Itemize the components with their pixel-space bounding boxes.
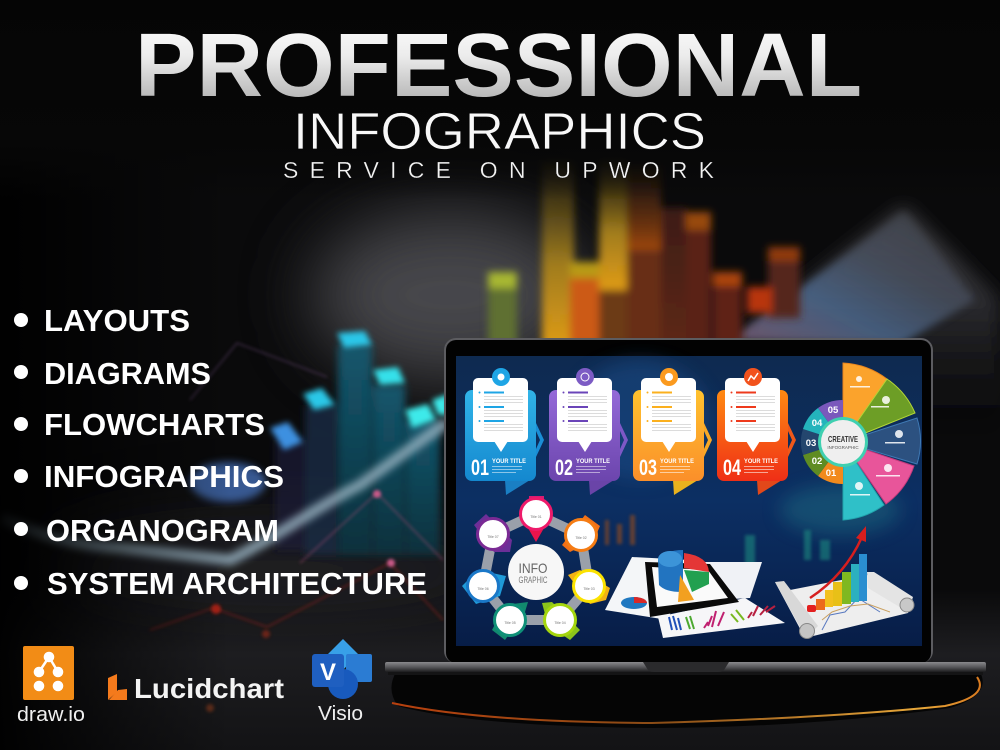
card 02: YOUR TITLE (576, 459, 610, 465)
subtitle: INFOGRAPHICS: INFOGRAPHICS (293, 103, 706, 161)
card 01 (465, 368, 544, 495)
hexagon infographic: Title 05 (504, 621, 516, 625)
logo: Lucidchart: Lucidchart (134, 673, 284, 704)
card 03: YOUR TITLE (660, 459, 694, 465)
icon: draw.io: draw.io (17, 704, 85, 726)
service list: ORGANOGRAM (46, 513, 279, 548)
hexagon infographic (462, 496, 610, 640)
pie chart (658, 550, 709, 602)
wheel: small ring: 01 (826, 468, 837, 479)
wheel: small ring (801, 400, 843, 484)
background: warm bars (488, 160, 800, 350)
service list: FLOWCHARTS (44, 407, 265, 442)
creative infographic wheel (801, 363, 920, 520)
icon: draw.io (17, 646, 85, 726)
card 04: YOUR TITLE (744, 459, 778, 465)
wheel: centre badge: INFOGRAPHIC (827, 445, 859, 450)
subtitle: service on upwork: SERVICE ON UPWORK (283, 157, 715, 183)
laptop lid (444, 338, 933, 663)
red arrow (810, 526, 866, 598)
wheel: small ring: 03 (806, 438, 816, 449)
laptop screen (456, 356, 922, 646)
tablet with pie chart and papers (605, 550, 785, 638)
mini pie (621, 597, 647, 609)
hexagon infographic: Title 01 (530, 515, 542, 519)
hexagon infographic: Title 02 (575, 536, 587, 540)
hexagon infographic: Title 06 (477, 587, 489, 591)
centre circle: INFO (518, 560, 548, 576)
service list: LAYOUTS (44, 303, 190, 338)
icon: Visio (312, 639, 372, 725)
background: paper wedge (720, 207, 1000, 440)
hexagon infographic: Title 03 (583, 587, 595, 591)
card 03: 03 (639, 455, 657, 480)
node ring (462, 496, 610, 640)
hexagon infographic: Title 04 (554, 621, 566, 625)
mini bar charts (669, 606, 775, 630)
bars (807, 554, 867, 612)
rising bar chart on blueprint (775, 526, 914, 638)
icon: Visio: Visio (318, 703, 363, 725)
service list: INFOGRAPHICS (44, 459, 284, 494)
background: teal bars (275, 345, 440, 555)
decorative darkening (0, 0, 230, 750)
wheel: small ring: 05 (828, 405, 839, 416)
wheel: sector labels (850, 376, 905, 496)
title: PROFESSIONAL: PROFESSIONAL (135, 16, 862, 116)
card 03 (633, 368, 712, 495)
card 01: YOUR TITLE (492, 459, 526, 465)
card 02: 02 (555, 455, 573, 480)
icon: Visio: V (320, 659, 336, 686)
wheel: centre badge (818, 417, 868, 467)
card 04: 04 (723, 455, 742, 480)
laptop base (385, 662, 986, 672)
wheel: centre badge: CREATIVE (828, 434, 858, 444)
hexagon infographic: Title 07 (487, 535, 499, 539)
service list (14, 303, 427, 601)
service list: DIAGRAMS (44, 356, 211, 391)
podium (391, 672, 983, 728)
card 04 (717, 368, 796, 495)
wheel: small ring: 02 (812, 456, 822, 467)
centre circle (508, 544, 564, 600)
card 01: 01 (471, 455, 489, 480)
background: rising line (0, 422, 447, 560)
centre circle: GRAPHIC (518, 575, 548, 585)
service list: SYSTEM ARCHITECTURE (47, 566, 427, 601)
wheel: small ring: 04 (812, 418, 823, 429)
laptop (385, 338, 986, 675)
card 02 (549, 368, 628, 495)
wheel: large sectors (843, 363, 920, 520)
